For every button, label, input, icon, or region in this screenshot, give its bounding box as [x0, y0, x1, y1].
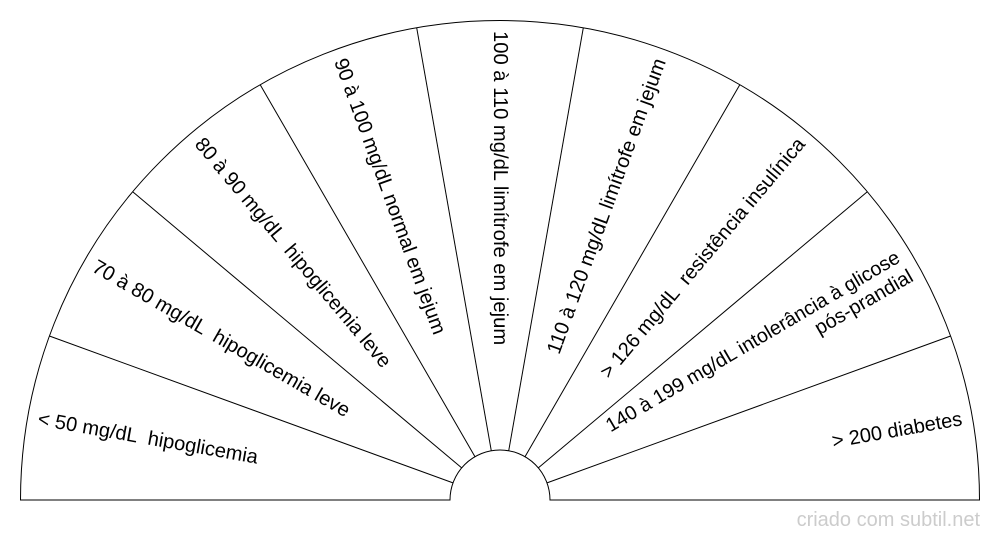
- watermark: criado com subtil.net: [797, 509, 980, 531]
- label: 100 to 110: 100 à 110 mg/dL limítrofe em jejum: [489, 31, 511, 345]
- label: under 50: < 50 mg/dL hipoglicemia: [36, 408, 261, 469]
- label: 140 to 199: 140 à 199 mg/dL intolerância à glicose: [602, 247, 904, 437]
- label: 70 to 80: 70 à 80 mg/dL hipoglicemia leve: [88, 256, 354, 422]
- label: 110 to 120: 110 à 120 mg/dL limítrofe em jejum: [543, 56, 671, 357]
- label: 140 to 199: pós-prandial: [811, 266, 917, 340]
- sector dividers: [49, 28, 951, 483]
- label: 90 to 100: 90 à 100 mg/dL normal em jejum: [329, 56, 450, 338]
- label: 80 to 90: 80 à 90 mg/dL hipoglicemia leve: [190, 134, 395, 372]
- label: over 200: > 200 diabetes: [830, 408, 964, 453]
- label: over 126: > 126 mg/dL resistência insulínica: [596, 133, 810, 383]
